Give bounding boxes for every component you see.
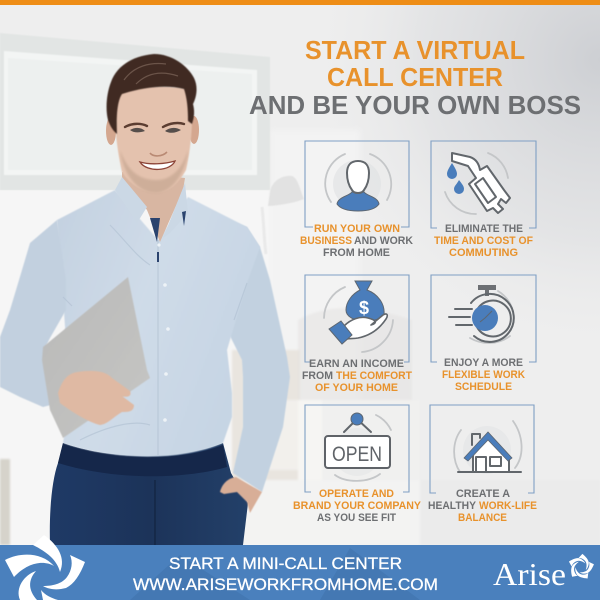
caption: ELIMINATE THE <box>445 223 523 235</box>
caption: TIME AND COST OF <box>434 235 533 247</box>
shirt torso <box>57 190 260 457</box>
logo: Arise wordmark: Arise <box>493 556 566 592</box>
caption: THE COMFORT <box>336 370 412 382</box>
caption: AS YOU SEE FIT <box>317 512 396 524</box>
caption: CREATE A <box>456 488 510 500</box>
title: CALL CENTER <box>327 62 503 92</box>
caption: FLEXIBLE WORK <box>442 369 525 381</box>
icon: fuel nozzle and drops <box>445 153 510 214</box>
box outline <box>305 141 409 227</box>
title <box>249 35 581 120</box>
eyes <box>130 128 181 133</box>
icon: pinwheel logo <box>5 535 85 600</box>
icon: house <box>454 421 522 474</box>
pocket hand <box>220 477 262 513</box>
title: AND BE YOUR OWN BOSS <box>249 90 581 120</box>
caption: RUN YOUR OWN <box>314 223 400 235</box>
panel: operate and brand <box>293 405 422 524</box>
laptop <box>42 277 150 438</box>
box outline <box>431 141 536 228</box>
shirt folds <box>63 225 247 455</box>
caption: COMMUTING <box>449 247 518 259</box>
logo: small pinwheel <box>567 553 594 581</box>
caption <box>300 223 413 259</box>
box outline <box>430 405 534 493</box>
caption: SCHEDULE <box>455 381 512 393</box>
panel: flexible schedule <box>431 275 536 393</box>
eyebrows <box>125 123 184 127</box>
caption: BALANCE <box>458 512 507 524</box>
icon: money bag in hand: $ <box>359 298 369 318</box>
footer text: WWW.ARISEWORKFROMHOME.COM <box>133 575 438 594</box>
neck <box>122 172 185 242</box>
furniture <box>0 308 600 545</box>
stubble <box>120 150 188 193</box>
footer text: START A MINI-CALL CENTER <box>169 554 402 573</box>
box outline <box>431 275 536 362</box>
left collar <box>115 177 147 223</box>
right arm <box>200 210 290 492</box>
navy placket <box>150 211 186 262</box>
window <box>0 33 270 190</box>
caption <box>302 358 412 394</box>
caption: BRAND YOUR COMPANY <box>293 500 422 512</box>
top orange bar <box>0 0 600 5</box>
caption <box>293 488 422 524</box>
hair <box>107 54 197 134</box>
caption: FROM <box>302 370 333 382</box>
trousers <box>50 443 248 545</box>
holding hand <box>58 371 134 425</box>
caption: OPERATE AND <box>319 488 394 500</box>
caption: EARN AN INCOME <box>309 358 404 370</box>
fly seam <box>154 480 156 545</box>
box outline <box>305 275 409 362</box>
mouth <box>140 161 175 169</box>
caption: OF YOUR HOME <box>315 382 398 394</box>
caption <box>428 488 537 524</box>
caption <box>442 357 525 393</box>
panel: eliminate commuting <box>431 141 536 259</box>
panel: earn an income <box>302 275 412 394</box>
hair highlights <box>124 64 178 84</box>
icon: open sign: OPEN <box>332 443 382 466</box>
left arm <box>0 220 66 407</box>
nose <box>150 152 167 156</box>
panel: run your own business <box>300 141 413 259</box>
ears <box>106 117 116 145</box>
caption: FROM HOME <box>323 247 390 259</box>
caption: WORK-LIFE <box>479 500 537 512</box>
box outline <box>305 405 409 492</box>
caption: HEALTHY <box>428 500 477 512</box>
shirt buttons <box>157 243 170 422</box>
icon: stopwatch <box>449 285 514 343</box>
person <box>0 54 290 545</box>
footer banner <box>0 535 600 600</box>
caption <box>434 223 533 259</box>
caption: AND WORK <box>354 235 413 247</box>
face <box>115 87 192 193</box>
title: START A VIRTUAL <box>305 35 525 65</box>
caption: ENJOY A MORE <box>444 357 523 369</box>
belt <box>58 443 227 476</box>
panel: work-life balance <box>428 405 537 524</box>
caption: BUSINESS <box>300 235 352 247</box>
right collar <box>163 183 188 238</box>
floor lamp <box>262 176 304 254</box>
icon: person <box>325 154 391 211</box>
footer text <box>133 554 438 594</box>
